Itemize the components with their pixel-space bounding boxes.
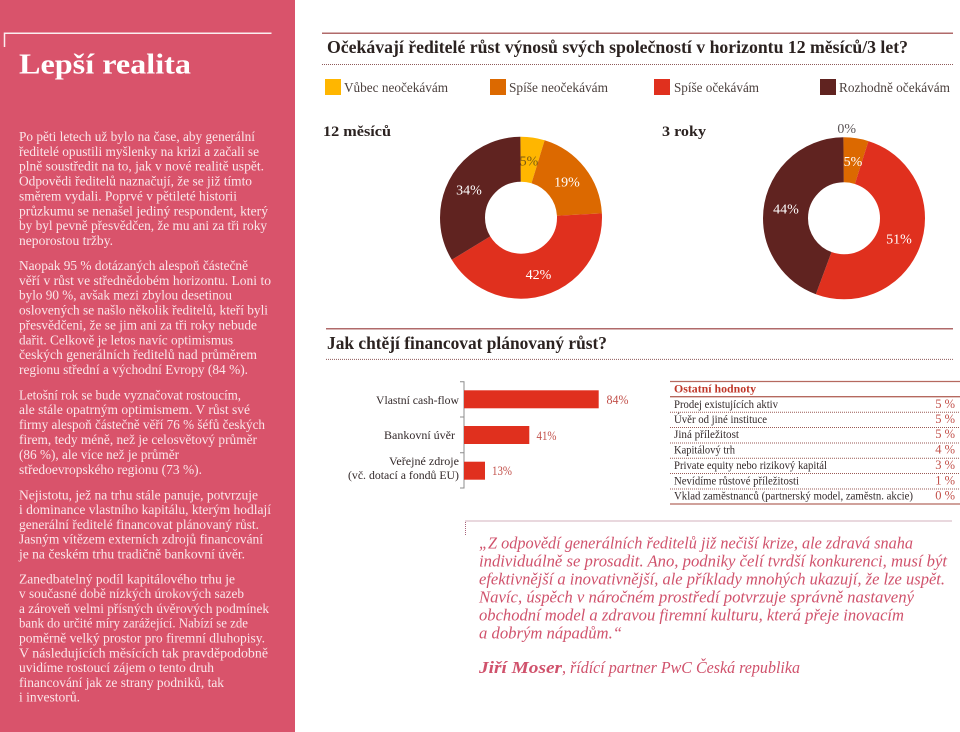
- callout: quote: „Z odpovědí generálních ředitelů již nečiší krize, ale zdravá snaha: [479, 534, 913, 552]
- text block: intro: Po pěti letech už bylo na čase, aby generální: [19, 129, 255, 144]
- text block: this year: ale stále opatrným optimismem. V růst své: [19, 402, 250, 417]
- table: other values: 3 %: [935, 458, 955, 472]
- heading: revenue growth: Očekávají ředitelé růst výnosů svých společností v horizontu 12 měsíců/3 let?: [327, 37, 908, 57]
- donut chart: 12 months: 42%: [526, 268, 552, 283]
- table: other values: Private equity nebo rizikový kapitál: [674, 460, 827, 472]
- table: other values: Jiná příležitost: [674, 429, 740, 441]
- donut chart: 12 months: [323, 124, 580, 283]
- bar chart: 41%: [536, 428, 557, 443]
- table: other values: Prodej existujících aktiv: [674, 399, 778, 411]
- text block: intro: by byl pevně přesvědčen, že mu ani za tři roky: [19, 218, 267, 233]
- bar chart: Bankovní úvěr: [384, 428, 455, 442]
- donut chart: 12 months: 34%: [456, 184, 482, 198]
- bar chart: (vč. dotací a fondů EU): [348, 468, 459, 482]
- text block: uncertainty: i dominance vlastního kapitálu, kterým hodlají: [19, 502, 271, 517]
- bar chart: 13%: [492, 463, 512, 478]
- panel: left sidebar: [0, 0, 295, 732]
- donut chart: 3 years: 51%: [886, 232, 912, 248]
- text block: capital market: V následujících měsících tak pravděpodobně: [19, 645, 268, 660]
- text block: optimism: českých generálních ředitelů nad průměrem: [19, 347, 258, 362]
- text block: capital market: poměrně velký prostor pro firemní dluhopisy.: [19, 630, 265, 646]
- text block: capital market: a zároveň velmi přísných úvěrových podmínek: [19, 601, 269, 616]
- legend: Spíše neočekávám: [509, 80, 609, 95]
- callout: quote: [466, 521, 952, 677]
- text block: uncertainty: [18, 487, 271, 561]
- text block: this year: (86 %), ale více než je průměr: [19, 447, 180, 462]
- bar chart: 84%: [606, 392, 629, 407]
- legend: Vůbec neočekávám: [344, 80, 449, 95]
- text block: uncertainty: Jasným vítězem externích zdrojů financování: [19, 532, 263, 546]
- donut chart: 12 months: 12 měsíců: [323, 124, 391, 140]
- table: other values: 5 %: [935, 412, 955, 426]
- text block: capital market: Zanedbatelný podíl kapitálového trhu je: [19, 571, 235, 586]
- donut chart: 3 years: 5%: [844, 155, 863, 170]
- callout: quote: a dobrým nápadům.“: [479, 624, 622, 642]
- title: Lepší realita: [19, 48, 192, 80]
- donut chart: 3 years: 44%: [773, 202, 799, 218]
- text block: intro: ředitelé opustili myšlenky na krizi a začali se: [19, 144, 259, 159]
- quote attribution: Jiří Moser: [478, 658, 563, 677]
- callout: quote: individuálně se prosadit. Ano, podniky čelí tvrdší konkurenci, musí být: [479, 552, 947, 570]
- text block: uncertainty: je na českém trhu tradičně bankovní úvěr.: [18, 546, 245, 561]
- text block: optimism: regionu střední a východní Evropy (84 %).: [19, 362, 248, 377]
- text block: capital market: v současné době nízkých úrokových sazeb: [19, 586, 244, 601]
- bar chart: [348, 382, 629, 488]
- text block: this year: [19, 387, 265, 477]
- text block: uncertainty: generální ředitelé financovat plánovaný růst.: [19, 517, 259, 532]
- text block: capital market: financování jak ze strany podniků, tak: [19, 675, 224, 690]
- donut chart: 3 years: 3 roky: [662, 124, 707, 140]
- text block: capital market: uvidíme rostoucí zájem o tento druh: [19, 660, 214, 675]
- text block: intro: neporostou tržby.: [19, 233, 113, 248]
- panel: growth financing: [326, 329, 960, 504]
- legend: [325, 79, 951, 95]
- text block: optimism: dařit. Celkově je letos navíc optimismus: [19, 332, 233, 347]
- text block: optimism: přesvědčeni, že se jim ani za tři roky nebude: [19, 317, 257, 332]
- heading: financing: Jak chtějí financovat plánovaný růst?: [327, 333, 607, 353]
- table: other values: Kapitálový trh: [674, 444, 735, 456]
- text block: intro: [19, 129, 268, 248]
- text block: optimism: [19, 258, 271, 377]
- text block: capital market: bank do určité míry zarážející. Nabízí se zde: [19, 616, 248, 631]
- legend: Spíše očekávám: [674, 80, 760, 95]
- text block: intro: směrem vydali. Poprvé v pětileté historii: [19, 188, 237, 203]
- callout: quote: Navíc, úspěch v náročném prostředí potvrzuje správně nastavený: [478, 588, 915, 606]
- text block: optimism: bylo 90 %, avšak mezi zbylou desetinou: [19, 288, 232, 303]
- text block: intro: plně soustředit na to, jak v nové realitě uspět.: [19, 159, 264, 174]
- text block: optimism: věří v růst ve střednědobém horizontu. Loni to: [19, 273, 271, 288]
- text block: capital market: i investorů.: [19, 690, 80, 705]
- text block: this year: firem, tedy méně, než je celosvětový průměr: [19, 432, 258, 447]
- quote attribution: , řídící partner PwC Česká republika: [562, 658, 800, 677]
- text block: optimism: Naopak 95 % dotázaných alespoň částečně: [19, 258, 248, 273]
- table: other values: 0 %: [935, 488, 955, 502]
- text block: this year: Letošní rok se bude vyznačovat rostoucím,: [19, 387, 241, 402]
- text block: capital market: [19, 571, 269, 705]
- panel: revenue growth expectations: [322, 33, 953, 283]
- text block: this year: firmy alespoň částečně věří 76 % šéfů českých: [19, 417, 265, 432]
- table: other values: Ostatní hodnoty: [674, 384, 756, 396]
- table: other values: 5 %: [935, 427, 955, 441]
- legend: Rozhodně očekávám: [839, 80, 951, 95]
- table: other values: Vklad zaměstnanců (partnerský model, zaměstn. akcie): [674, 490, 913, 502]
- text block: uncertainty: Nejistotu, jež na trhu stále panuje, potvrzuje: [19, 487, 258, 502]
- text block: this year: středoevropského regionu (73 %).: [19, 462, 202, 477]
- bar chart: Vlastní cash-flow: [376, 393, 459, 407]
- text block: intro: průzkumu se nenašel jediný respondent, který: [19, 203, 268, 218]
- table: other values: Nevídíme růstové příležitosti: [674, 476, 799, 488]
- text block: optimism: oslovených se našlo několik ředitelů, kteří byli: [19, 303, 268, 318]
- text block: intro: Odpovědi ředitelů naznačují, že se již tímto: [19, 174, 252, 189]
- donut chart: 3 years: [662, 122, 912, 277]
- donut chart: 12 months: 5%: [520, 154, 539, 170]
- sidebar corner rule: [4, 33, 272, 47]
- table: other values: [670, 382, 960, 504]
- callout: quote: obchodní model a zdravou firemní kulturu, která přeje inovacím: [479, 606, 904, 624]
- table: other values: Úvěr od jiné instituce: [674, 414, 767, 426]
- table: other values: 1 %: [935, 474, 955, 488]
- callout: quote: efektivnější a inovativnější, ale příklady mnohých ukazují, že lze uspět.: [479, 570, 945, 588]
- donut chart: 12 months: 19%: [554, 176, 580, 190]
- table: other values: 5 %: [935, 397, 955, 411]
- table: other values: 4 %: [935, 442, 955, 456]
- bar chart: Veřejné zdroje: [389, 454, 459, 468]
- donut chart: 3 years: 0%: [837, 122, 856, 137]
